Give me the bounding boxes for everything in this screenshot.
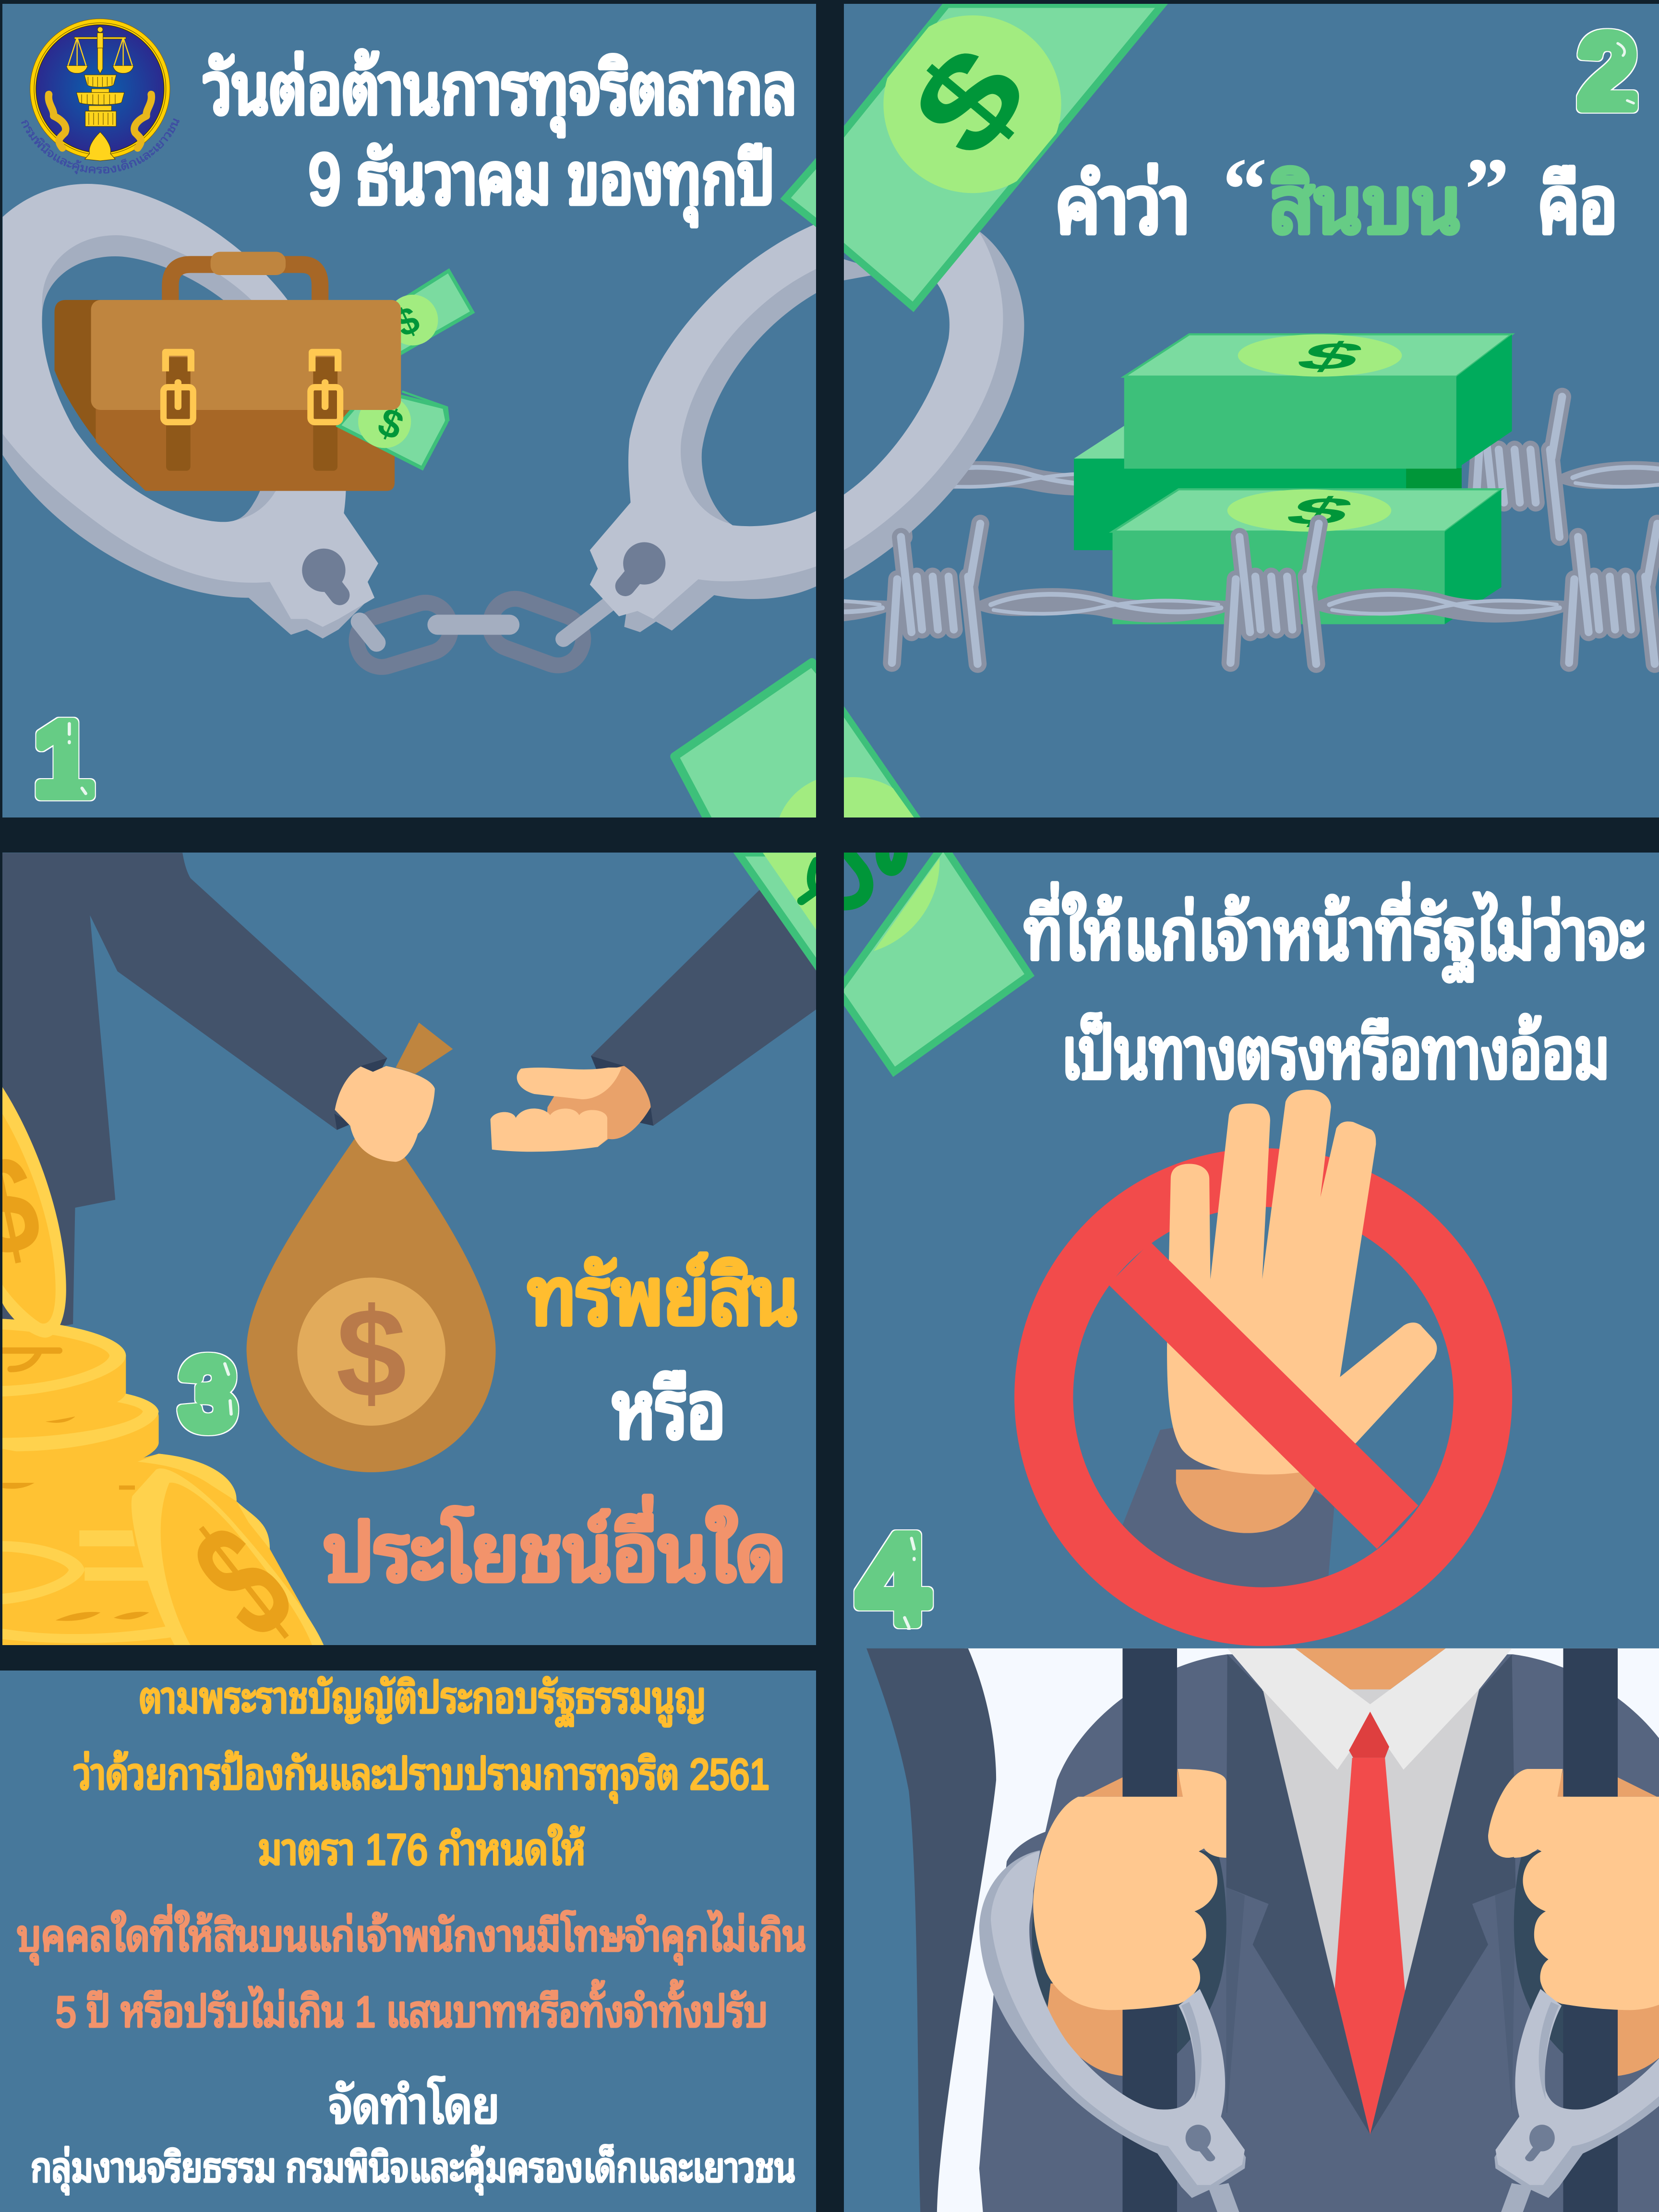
- banknote: sticking out of briefcase: [338, 389, 448, 468]
- text: property: ทรัพย์สิน: [528, 1252, 799, 1341]
- number 2: 2: [1578, 13, 1637, 130]
- money stack: top: $: [1286, 335, 1375, 377]
- arm and body: giver: [0, 853, 387, 1337]
- banknote: behind briefcase top: $: [388, 298, 426, 345]
- law text: title: ตามพระราชบัญญัติประกอบรัฐธรรมนูญ: [139, 1674, 706, 1726]
- prisoner illustration: [866, 1648, 1659, 2212]
- handcuff chain: [351, 592, 613, 673]
- handcuff ring: [844, 230, 1024, 579]
- law text: subject: ว่าด้วยการป้องกันและปราบปรามการทุจริต 2561: [74, 1751, 769, 1803]
- heading: word "the word": คำว่า: [1056, 161, 1190, 250]
- no symbol ring: [1044, 1178, 1483, 1617]
- barbed wire: top row: [818, 397, 1659, 537]
- right arm, bar, fist and cuff: [1494, 1648, 1659, 2212]
- gold coins pile: [0, 1454, 324, 1645]
- seal caption: department name on arc: กรมพินิจและคุ้มครองเด็กและเยาวชน: [21, 118, 180, 174]
- banknote: large top left: $: [883, 19, 1055, 183]
- money stack: middle: [1074, 426, 1462, 550]
- foreground cell post: [866, 1648, 996, 2212]
- handcuff: right: [590, 222, 820, 632]
- penalty text: line 2: 5 ปี หรือปรับไม่เกิน 1 แสนบาทหรือทั้งจำทั้งปรับ: [56, 1980, 768, 2036]
- text: other benefits: ประโยชน์อื่นใด: [324, 1496, 787, 1598]
- gold coin: large tilted: $: [161, 1489, 324, 1674]
- suit sleeve in no symbol: [1115, 1427, 1334, 1597]
- heading: word "is": คือ: [1539, 161, 1618, 250]
- money bag: [247, 1022, 496, 1472]
- gold coin: lower stack: [0, 1387, 159, 1517]
- number 4: 4: [858, 1509, 929, 1650]
- white cell background: [930, 1648, 1659, 2212]
- money bag: $: [336, 1282, 407, 1424]
- penalty text: line 1: บุคคลใดที่ให้สินบนแก่เจ้าพนักงานมีโทษจำคุกไม่เกิน: [17, 1905, 806, 1964]
- money stack: bottom: [1113, 489, 1502, 624]
- suit body: [979, 1654, 1659, 2212]
- banknote: top right corner: [785, 156, 823, 228]
- banknote: behind briefcase top: [387, 271, 472, 356]
- law text: section: มาตรา 176 กำหนดให้: [258, 1825, 586, 1874]
- banknote: bottom right corner: [674, 662, 907, 907]
- panel 4: stop bribery and prisoner behind bars: [751, 767, 1659, 2212]
- gold coin: upper stack: [0, 1319, 126, 1425]
- receiving hand: [491, 1066, 650, 1152]
- handcuff: left: [3, 184, 378, 638]
- briefcase: [55, 252, 448, 491]
- right hand thumb: [1488, 1769, 1570, 1858]
- gold coin: upright left: [0, 1083, 66, 1338]
- raised hand: [1167, 1090, 1437, 1533]
- neck: [1295, 1648, 1446, 1704]
- department seal: [30, 19, 170, 161]
- credit heading: จัดทำโดย: [329, 2076, 500, 2134]
- heading: opening quote: “: [1222, 139, 1267, 239]
- panel 2: definition of bribe with money and barbed wire: [642, 0, 1659, 825]
- title: line 2: 9 ธันวาคม ของทุกปี: [308, 139, 775, 226]
- money stack: top: [1124, 334, 1512, 469]
- panel 5: legal text and credits: [0, 1671, 816, 2212]
- number 1: 1: [35, 700, 93, 817]
- text: or: หรือ: [613, 1366, 726, 1455]
- banknote: large top left: [840, 4, 1163, 307]
- number 3: 3: [180, 1337, 237, 1451]
- necktie: [1334, 1712, 1405, 2134]
- credit organisation: กลุ่มงานจริยธรรม กรมพินิจและคุ้มครองเด็กและเยาวชน: [31, 2145, 796, 2195]
- arm: receiver: [591, 885, 820, 1126]
- no symbol slash: [1108, 1242, 1419, 1549]
- money stack: bottom: $: [1275, 490, 1364, 532]
- panel 1: handcuffs and briefcase: [2, 4, 816, 817]
- left arm, bar, fist and cuff: [979, 1648, 1246, 2212]
- heading: bribe keyword: สินบน: [1270, 161, 1462, 250]
- banknote: top right corner: [738, 853, 820, 970]
- shirt: [1262, 1689, 1479, 2134]
- panel 3: handing over the money bag: [0, 850, 821, 1674]
- banknote: sticking out of briefcase: $: [372, 398, 409, 449]
- hand holding bag: [335, 1066, 435, 1162]
- title: line 1: วันต่อต้านการทุจริตสากล: [204, 49, 797, 136]
- shirt collar: [1227, 1648, 1512, 1770]
- banknote: top left: [751, 767, 1030, 1072]
- barbed wire: front row: [642, 524, 1658, 664]
- heading: closing quote: ”: [1465, 139, 1510, 239]
- jacket lapels: [1226, 1654, 1515, 2134]
- banknote: bottom left: [840, 706, 922, 825]
